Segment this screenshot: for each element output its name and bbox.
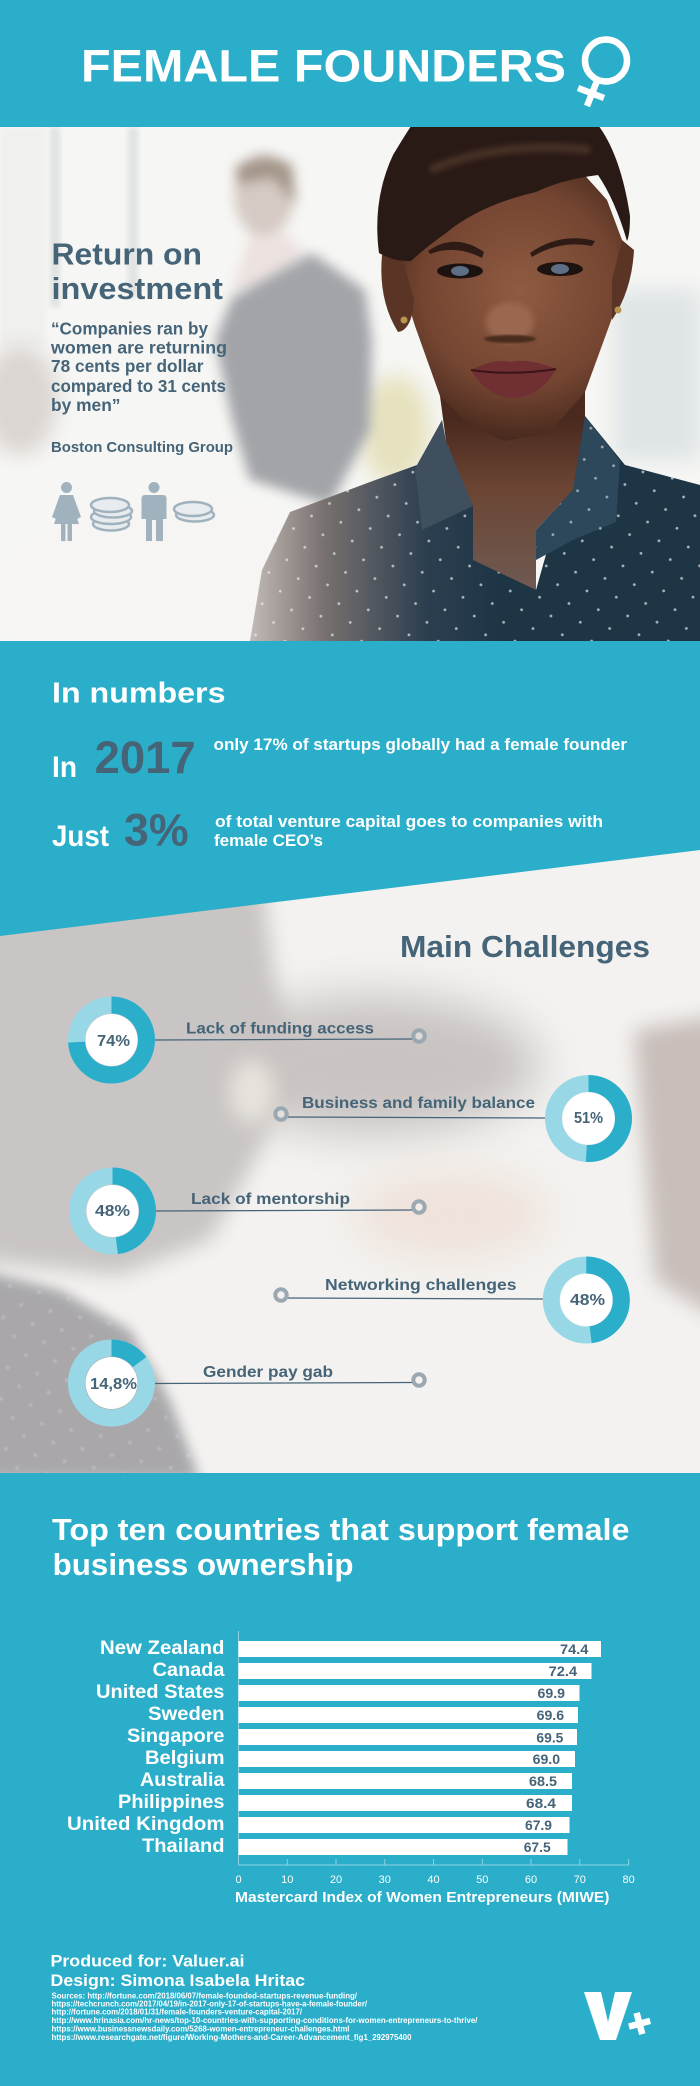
- sources: https://www.researchgate.net/figure/Working-Mothers-and-Career-Advancement_fig1_292975400: [52, 2033, 412, 2042]
- panel: hero photo: [0, 120, 700, 641]
- challenge: business and family balance: 51%: [574, 1110, 603, 1127]
- country labels: United States: [96, 1682, 224, 1703]
- axis labels: 40: [427, 1874, 440, 1886]
- sources: http://www.hrinasia.com/hr-news/top-10-countries-with-supporting-conditions-for-women-entrepreneurs-to-thrive/: [52, 2016, 478, 2025]
- background man: [232, 153, 305, 300]
- country labels: United Kingdom: [67, 1814, 224, 1835]
- icon: coins large: [91, 498, 132, 530]
- challenge: networking challenges: [275, 1265, 621, 1335]
- country labels: Philippines: [118, 1792, 224, 1813]
- axis labels: 50: [476, 1874, 488, 1886]
- icon: woman: [52, 482, 81, 541]
- quote: by men”: [51, 395, 120, 415]
- quote: women are returning: [50, 338, 227, 358]
- country labels: New Zealand: [100, 1638, 224, 1659]
- bars: [238, 1641, 601, 1855]
- left collar: [415, 420, 473, 530]
- value labels: 69.5: [536, 1730, 564, 1746]
- axis labels: [235, 1874, 635, 1886]
- challenge: business and family balance: [275, 1084, 624, 1154]
- woman shirt: [250, 416, 700, 641]
- value labels: 68.4: [526, 1795, 556, 1811]
- value labels: 69.0: [533, 1751, 560, 1767]
- neck and chest: [440, 380, 585, 590]
- quote: compared to 31 cents: [51, 376, 226, 396]
- heading: In numbers: [52, 678, 226, 710]
- country labels: [67, 1638, 225, 1857]
- stat: 2017: 2017: [95, 732, 196, 783]
- stat: 3%: [52, 805, 603, 856]
- country labels: Singapore: [127, 1726, 224, 1747]
- sources: [52, 1991, 478, 2042]
- challenge: gender pay gab: 14,8%: [90, 1376, 137, 1393]
- icon: man: [142, 482, 166, 541]
- stat: 3%: of total venture capital goes to companies with: [215, 813, 603, 831]
- panel: main challenges background: [0, 850, 700, 1480]
- challenge: lack of funding access: [76, 1005, 425, 1075]
- lips: [471, 361, 556, 398]
- axis labels: 30: [379, 1874, 391, 1886]
- sources: http://fortune.com/2018/01/31/female-founders-venture-capital-2017/: [52, 2008, 303, 2017]
- challenge: lack of mentorship: 48%: [95, 1203, 130, 1220]
- quote: 78 cents per dollar: [51, 356, 204, 376]
- icon: venus symbol: [578, 40, 627, 106]
- sources: https://techcrunch.com/2017/04/19/in-2017-only-17-of-startups-have-a-female-founder/: [52, 1999, 368, 2008]
- value labels: 67.5: [524, 1839, 551, 1855]
- value labels: 72.4: [549, 1663, 577, 1679]
- value labels: 69.6: [537, 1707, 564, 1723]
- quote: “Companies ran by: [51, 319, 208, 339]
- challenge: lack of funding access: Lack of funding access: [186, 1021, 374, 1038]
- country labels: Belgium: [145, 1748, 224, 1769]
- credits: Design: Simona Isabela Hritac: [50, 1971, 305, 1990]
- hair: [377, 120, 630, 261]
- value labels: 74.4: [560, 1641, 589, 1657]
- challenge: gender pay gab: [76, 1348, 425, 1418]
- sources: https://www.businessnewsdaily.com/5268-women-entrepreneur-challenges.html: [52, 2025, 350, 2034]
- challenge: lack of funding access: 74%: [97, 1033, 130, 1050]
- eyes: [437, 264, 483, 278]
- country labels: Sweden: [148, 1704, 224, 1725]
- bar chart: [67, 1631, 635, 1906]
- header banner: [0, 0, 700, 127]
- quote: [50, 319, 227, 415]
- country labels: Thailand: [142, 1836, 224, 1857]
- ears: [381, 250, 414, 332]
- face: [393, 170, 622, 441]
- eyebrows: [428, 242, 484, 258]
- challenge: networking challenges: 48%: [570, 1292, 605, 1309]
- stat: 2017: only 17% of startups globally had a female founder: [214, 736, 628, 754]
- panel: in numbers: [0, 641, 700, 936]
- sources: Sources: http://fortune.com/2018/06/07/female-founded-startups-revenue-funding/: [52, 1991, 358, 2000]
- heading: business ownership: [53, 1547, 353, 1582]
- text block: return on investment: [50, 236, 233, 456]
- heading: Return on: [52, 236, 202, 272]
- value labels: 67.9: [525, 1817, 552, 1833]
- value labels: 68.5: [529, 1773, 557, 1789]
- panel: top ten countries: [0, 1473, 700, 2086]
- stat: 2017: In: [52, 751, 77, 784]
- value labels: [524, 1641, 589, 1855]
- axis labels: 10: [281, 1874, 293, 1886]
- axis labels: 0: [235, 1874, 242, 1886]
- challenge: gender pay gab: Gender pay gab: [203, 1364, 333, 1381]
- credits: Produced for: Valuer.ai: [50, 1952, 244, 1971]
- challenge: networking challenges: Networking challenges: [325, 1277, 517, 1294]
- value labels: 69.9: [538, 1685, 565, 1701]
- challenge: lack of mentorship: Lack of mentorship: [191, 1191, 350, 1208]
- nose: [485, 302, 534, 336]
- axis labels: 60: [525, 1874, 537, 1886]
- heading: [52, 1512, 630, 1582]
- axis labels: 80: [622, 1874, 635, 1886]
- challenge: lack of mentorship: [78, 1176, 425, 1246]
- axis labels: 70: [574, 1874, 586, 1886]
- stat: 3%: Just: [52, 820, 109, 853]
- icon: V+ logo: [584, 1992, 651, 2040]
- heading: investment: [52, 271, 223, 306]
- axis title: Mastercard Index of Women Entrepreneurs (MIWE): [235, 1889, 609, 1906]
- heading: Top ten countries that support female: [52, 1512, 630, 1547]
- stat: 3%: female CEO’s: [214, 832, 323, 850]
- heading: main challenges: Main Challenges: [400, 929, 650, 964]
- country labels: Canada: [153, 1660, 225, 1681]
- challenge: business and family balance: Business and family balance: [302, 1095, 535, 1112]
- title: FEMALE FOUNDERS: [81, 40, 566, 92]
- stat: 3%: 3%: [124, 805, 188, 856]
- country labels: Australia: [140, 1770, 225, 1791]
- heading: [52, 236, 223, 306]
- source: Boston Consulting Group: [51, 439, 233, 456]
- icon: coins small: [174, 502, 214, 522]
- credits: [50, 1952, 305, 1990]
- axis labels: 20: [330, 1874, 342, 1886]
- stat: 2017: [52, 732, 628, 784]
- right collar: [536, 416, 620, 560]
